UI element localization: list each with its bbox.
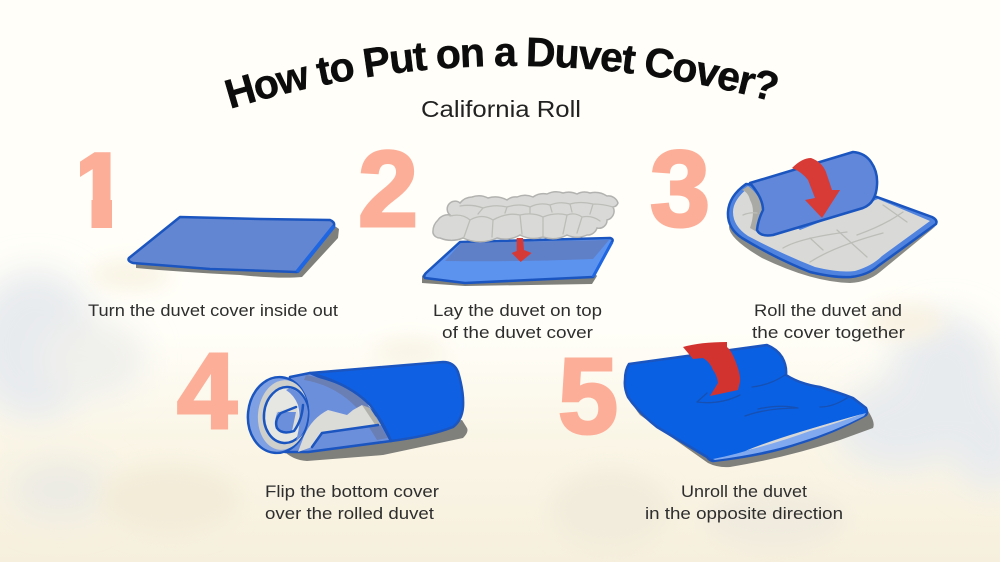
arrow: curved up <box>683 342 740 396</box>
caption 5: Unroll the duvet <box>681 482 807 501</box>
number 1 <box>80 152 112 228</box>
caption 2: of the duvet cover <box>442 323 593 342</box>
caption 2 <box>433 301 602 342</box>
illustration: flat inside-out duvet cover <box>128 217 339 278</box>
caption 5: in the opposite direction <box>645 504 843 523</box>
caption 2: Lay the duvet on top <box>433 301 602 320</box>
step 3 <box>650 128 936 342</box>
caption 3 <box>752 301 905 342</box>
caption 4 <box>265 482 439 523</box>
number 3: 3 <box>650 128 710 249</box>
step 1 <box>80 152 339 316</box>
arrow: curved down <box>792 158 840 218</box>
illustration: rolling duvet and cover <box>728 152 936 283</box>
illustration: unrolled duvet <box>625 342 874 467</box>
step 5 <box>558 335 874 523</box>
caption 5 <box>645 482 843 523</box>
arrow: down <box>512 238 532 262</box>
caption 3: the cover together <box>752 323 905 342</box>
number 4: 4 <box>177 330 237 451</box>
caption 3: Roll the duvet and <box>754 301 902 320</box>
caption 4: over the rolled duvet <box>265 504 434 523</box>
illustration: duvet above cover <box>422 192 618 286</box>
title: How to Put on a Duvet Cover? <box>224 38 778 108</box>
caption 4: Flip the bottom cover <box>265 482 439 501</box>
illustration: bottom cover flipped over roll <box>244 362 468 461</box>
step 4 <box>177 330 468 523</box>
number 5: 5 <box>558 335 618 456</box>
subtitle: California Roll <box>421 96 581 122</box>
number 2: 2 <box>358 128 418 249</box>
step 2 <box>358 128 618 342</box>
number 1: 1 <box>69 130 129 251</box>
caption 1: Turn the duvet cover inside out <box>88 301 338 320</box>
